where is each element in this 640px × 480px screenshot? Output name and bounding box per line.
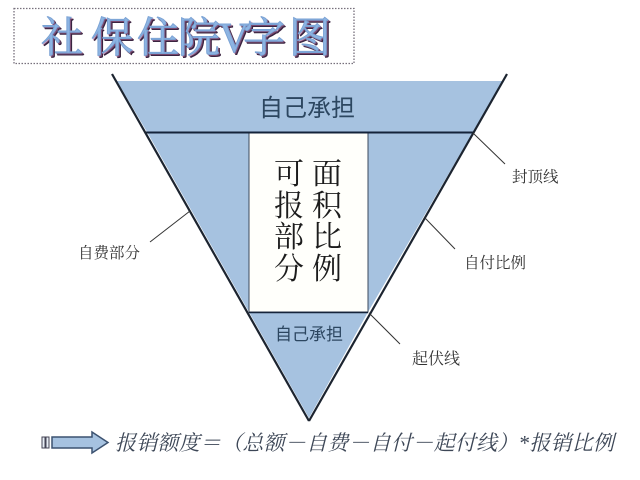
panel: right self-paid area bbox=[368, 132, 473, 312]
icon: formula arrow bbox=[42, 432, 108, 453]
reimbursable area label, right column: 例 bbox=[312, 253, 342, 286]
callout: ceiling line: 封顶线 bbox=[512, 168, 559, 186]
inverted triangle diagram bbox=[112, 74, 507, 421]
reimbursable area label, left column: 分 bbox=[274, 253, 304, 286]
callout: ceiling line bbox=[473, 133, 559, 186]
reimbursable area label, right column bbox=[312, 158, 343, 286]
reimbursable area label, right column: 面 bbox=[312, 158, 342, 191]
bottom triangle label: 自己承担 bbox=[275, 325, 343, 344]
title: 社保住院V字图 bbox=[43, 18, 333, 64]
reimbursable area label, left column: 部 bbox=[274, 221, 304, 254]
top band label: 自己承担 bbox=[259, 95, 355, 122]
callout: co-pay ratio bbox=[425, 218, 526, 272]
left edge of V bbox=[112, 74, 309, 421]
panel: top band, self-paid bbox=[117, 81, 503, 132]
panel: bottom triangle, self-paid bbox=[249, 312, 368, 418]
panel: left self-paid area bbox=[147, 132, 249, 312]
callout: co-pay ratio: 自付比例 bbox=[464, 254, 526, 272]
reimbursable area label, left column: 报 bbox=[274, 190, 304, 223]
reimbursable area label, right column: 积 bbox=[312, 190, 343, 223]
right edge of V bbox=[309, 74, 507, 421]
ceiling line bbox=[146, 132, 473, 134]
formula: 报销额度＝（总额－自费－自付－起付线）*报销比例 bbox=[115, 431, 618, 455]
callout: deductible line bbox=[369, 313, 460, 368]
deductible line bbox=[249, 312, 368, 314]
title: 社保住院V字图 bbox=[42, 17, 332, 63]
title: 社保住院V字图 bbox=[41, 16, 331, 62]
callout: self-paid part bbox=[78, 211, 190, 262]
title box bbox=[14, 8, 354, 64]
reimbursable area label, left column: 可 bbox=[274, 158, 304, 191]
callout: self-paid part: 自费部分 bbox=[78, 244, 141, 262]
panel: reimbursable area bbox=[249, 132, 368, 312]
reimbursable area label, right column: 比 bbox=[312, 221, 342, 254]
callout: deductible line: 起伏线 bbox=[412, 350, 460, 368]
reimbursable area label, left column bbox=[274, 158, 304, 286]
